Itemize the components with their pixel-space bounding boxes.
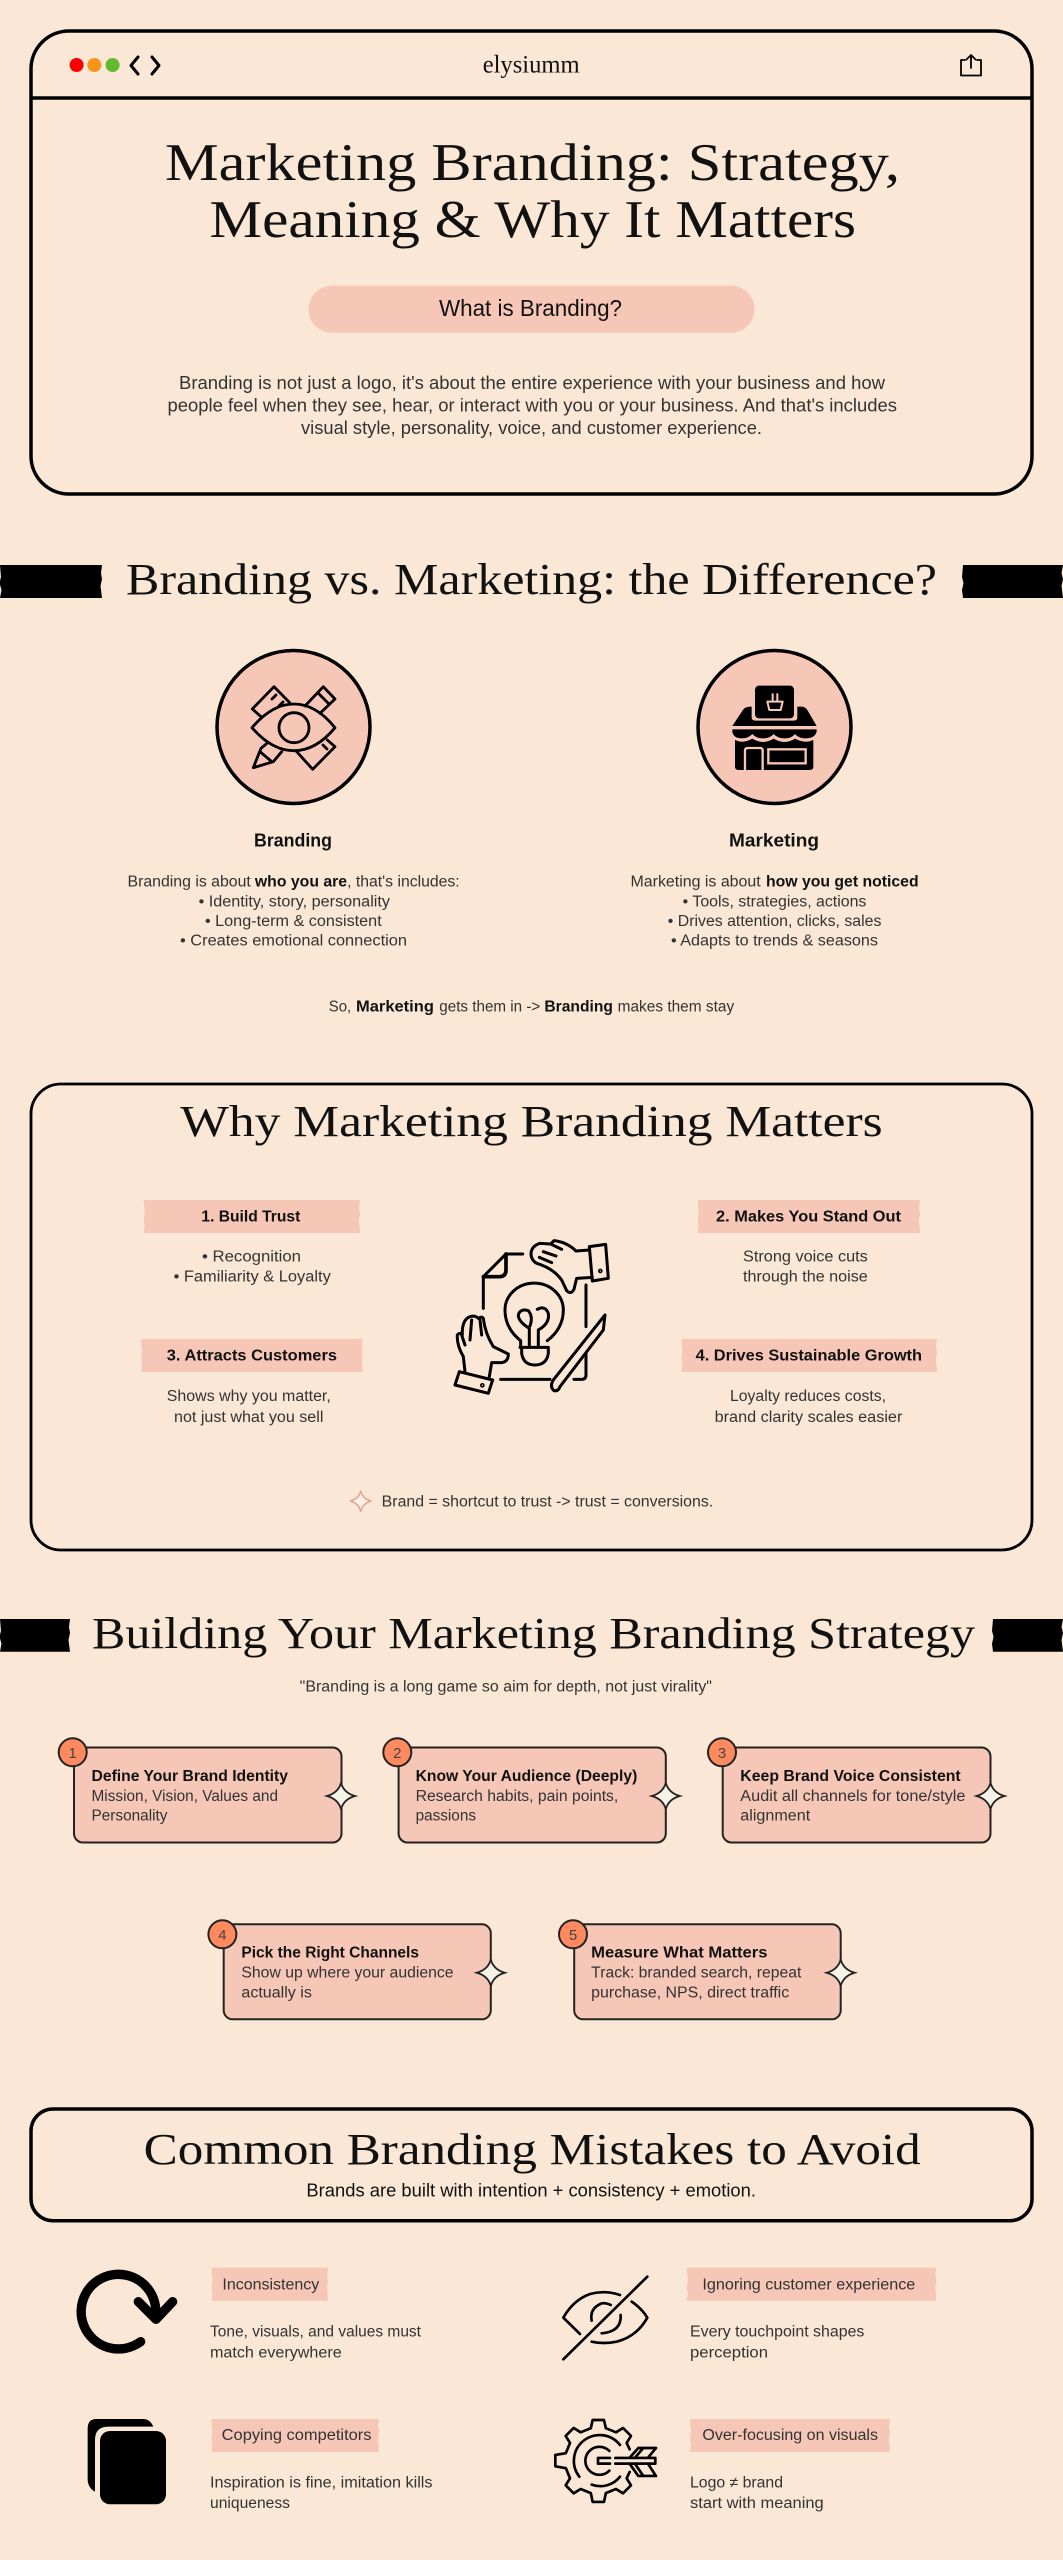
heading: Common Branding Mistakes to Avoid	[144, 2125, 921, 2174]
title: Marketing Branding: Strategy,	[165, 134, 900, 192]
step card 4: Show up where your audience	[241, 1964, 454, 1981]
mistake: copying competitors: uniqueness	[210, 2495, 290, 2512]
step card 2: Know Your Audience (Deeply)	[416, 1768, 637, 1785]
step card 2: 2	[393, 1745, 401, 1762]
text: branding list: , that's includes:	[347, 874, 460, 891]
reason 2: 2. Makes You Stand Out	[716, 1209, 901, 1226]
mistake: copying competitors: Copying competitors	[222, 2427, 372, 2444]
text: summary line: So,	[329, 999, 351, 1016]
mistake: ignoring customer experience	[563, 2268, 936, 2361]
mistake: inconsistency: Tone, visuals, and values must	[210, 2324, 422, 2341]
step card 1: Define Your Brand Identity	[92, 1768, 288, 1785]
icon: window control dots	[70, 58, 120, 72]
text: summary line	[329, 999, 734, 1016]
reason 3	[141, 1339, 363, 1426]
icon: code chevrons	[131, 57, 159, 74]
text: marketing list: • Tools, strategies, actions	[683, 894, 867, 911]
text: summary line: Marketing	[356, 999, 434, 1016]
callout: brand equals trust: Brand = shortcut to trust -> trust = conversions.	[382, 1494, 713, 1511]
label: marketing: Marketing	[729, 831, 819, 851]
mistake: over-focusing on visuals: Over-focusing on visuals	[702, 2427, 878, 2444]
reason 3: Shows why you matter,	[167, 1388, 331, 1405]
panel: browser window hero	[31, 31, 1032, 494]
text: branding definition: people feel when they see, hear, or interact with you or your business. And that's includes	[168, 396, 897, 416]
heading: Why Marketing Branding Matters	[180, 1097, 883, 1146]
pill: what is branding	[308, 286, 754, 333]
text: branding list: who you are	[254, 874, 347, 891]
tape: right black	[962, 565, 1063, 598]
text: branding list: • Identity, story, personality	[199, 894, 390, 911]
label: branding: Branding	[254, 831, 332, 851]
mistake: over-focusing on visuals: Logo ≠ brand	[690, 2474, 783, 2491]
pill: what is branding: What is Branding?	[439, 295, 622, 321]
title: Meaning & Why It Matters	[210, 191, 856, 249]
section: branding vs marketing	[0, 555, 1063, 1016]
step card 2: passions	[416, 1808, 476, 1825]
logo: elysiumm	[483, 52, 580, 79]
text: summary line: makes them stay	[618, 999, 734, 1016]
reason 4: 4. Drives Sustainable Growth	[696, 1348, 922, 1365]
icon: share	[961, 55, 981, 76]
text: marketing list: • Adapts to trends & seasons	[671, 933, 878, 950]
text: branding definition	[168, 373, 897, 438]
text: marketing list: Marketing is about	[630, 874, 761, 891]
icon: storefront in circle	[698, 650, 851, 804]
text: branding list: Branding is about	[128, 874, 252, 891]
mistake: ignoring customer experience: Ignoring customer experience	[702, 2276, 915, 2293]
step card 4: Pick the Right Channels	[241, 1944, 419, 1961]
step card 5: purchase, NPS, direct traffic	[591, 1984, 789, 2001]
step card 5: 5	[569, 1927, 577, 1944]
step card 4: actually is	[241, 1984, 312, 2001]
text: branding definition: visual style, personality, voice, and customer experience.	[301, 418, 762, 438]
step card 5: Track: branded search, repeat	[591, 1964, 802, 1981]
step card 1	[59, 1738, 355, 1842]
mistake: inconsistency	[81, 2268, 422, 2361]
heading: Branding vs. Marketing: the Difference?	[126, 555, 937, 604]
step card 3: 3	[718, 1745, 726, 1762]
title	[165, 134, 900, 249]
text: summary line: Branding	[544, 999, 613, 1016]
mistake: ignoring customer experience: perception	[690, 2344, 768, 2361]
text: marketing list: • Drives attention, clicks, sales	[668, 913, 882, 930]
reason 4	[681, 1339, 937, 1426]
text: branding list: • Creates emotional connection	[180, 933, 407, 950]
step card 1: 1	[69, 1745, 77, 1762]
step card 1: Personality	[92, 1808, 168, 1825]
icon: hands with lightbulb on paper	[455, 1241, 608, 1393]
reason 4: Loyalty reduces costs,	[730, 1388, 886, 1405]
reason 1: • Familiarity & Loyalty	[174, 1268, 331, 1285]
tape: left black	[0, 565, 102, 598]
step card 1: Mission, Vision, Values and	[92, 1788, 278, 1805]
icon: circular arrow	[81, 2274, 173, 2349]
text: branding definition: Branding is not just a logo, it's about the entire experience with your business and how	[179, 373, 886, 393]
step card 3: Keep Brand Voice Consistent	[740, 1768, 961, 1785]
step card 5	[559, 1920, 855, 2019]
heading: Building Your Marketing Branding Strategy	[92, 1609, 975, 1658]
icon: gear target with arrow	[555, 2420, 656, 2502]
text: marketing list: how you get noticed	[766, 874, 919, 891]
step card 4	[208, 1920, 505, 2019]
mistake: inconsistency: match everywhere	[210, 2344, 342, 2361]
text: marketing list	[630, 874, 919, 950]
reason 4: brand clarity scales easier	[715, 1409, 902, 1426]
tape: right black	[992, 1619, 1063, 1652]
text: branding list: • Long-term & consistent	[205, 913, 382, 930]
text: branding list	[128, 874, 460, 950]
step card 5: Measure What Matters	[591, 1944, 768, 1961]
subheading: Brands are built with intention + consistency + emotion.	[306, 2181, 756, 2201]
mistake: over-focusing on visuals: start with meaning	[690, 2495, 824, 2512]
reason 1: • Recognition	[202, 1249, 301, 1266]
reason 1	[144, 1200, 360, 1285]
mistake: copying competitors: Inspiration is fine, imitation kills	[210, 2474, 433, 2491]
mistake: over-focusing on visuals	[555, 2419, 890, 2512]
icon: crossed eye	[563, 2277, 647, 2359]
icon: eye with ruler and pencil in circle	[217, 650, 370, 804]
tape: left black	[0, 1619, 70, 1652]
mistake: ignoring customer experience: Every touchpoint shapes	[690, 2324, 865, 2341]
reason 2: through the noise	[743, 1268, 868, 1285]
panel: common branding mistakes header	[31, 2109, 1032, 2221]
panel: why marketing branding matters	[31, 1084, 1032, 1550]
text: summary line: gets them in ->	[439, 999, 540, 1016]
step card 2: Research habits, pain points,	[416, 1788, 618, 1805]
mistake: copying competitors	[88, 2419, 433, 2512]
icon: stacked copies	[88, 2419, 166, 2504]
quote: "Branding is a long game so aim for depth, not just virality"	[300, 1679, 712, 1696]
mistake: inconsistency: Inconsistency	[222, 2276, 320, 2293]
step card 2	[383, 1738, 680, 1842]
reason 3: 3. Attracts Customers	[167, 1348, 337, 1365]
reason 2: Strong voice cuts	[743, 1249, 868, 1266]
step card 4: 4	[218, 1927, 227, 1944]
reason 1: 1. Build Trust	[201, 1209, 300, 1226]
step card 3: Audit all channels for tone/style	[740, 1788, 965, 1805]
section: building strategy	[0, 1609, 1063, 2019]
step card 3	[708, 1738, 1004, 1842]
reason 2	[698, 1200, 920, 1285]
step card 3: alignment	[740, 1808, 811, 1825]
reason 3: not just what you sell	[174, 1409, 323, 1426]
